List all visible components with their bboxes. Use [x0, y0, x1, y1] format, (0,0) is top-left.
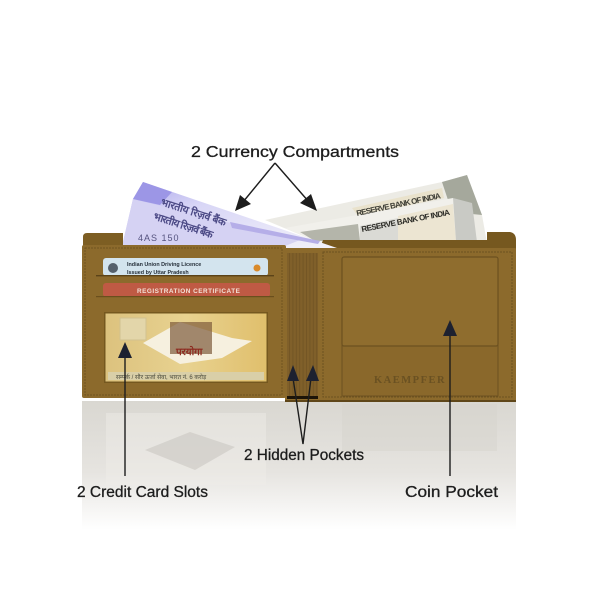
registration certificate card [103, 283, 270, 297]
label: coin pocket: Coin Pocket [405, 484, 499, 501]
wallet: right back flap [320, 232, 516, 250]
arrow: coin pocket [443, 320, 457, 476]
banknotes: grey-cream 200 rupee notes: RESERVE BANK OF INDIA [356, 191, 442, 218]
banknotes: purple 500 rupee notes: भारतीय रिज़र्व बैंक [159, 196, 229, 229]
wallet: left card panel [82, 245, 286, 398]
ID window with gold card: परयोगा [175, 345, 203, 358]
arrows: currency compartments [235, 163, 317, 211]
hidden pockets gusset [287, 253, 318, 396]
heading: 2 currency compartments: 2 Currency Compartments [191, 144, 399, 161]
card slot divider one [96, 275, 274, 276]
ID window with gold card [104, 312, 268, 383]
driving licence card: Indian Union Driving Licence [127, 262, 201, 268]
wallet: right panel [285, 248, 516, 402]
brand stamp: KAEMPFER [374, 375, 446, 386]
banknotes: grey-cream 200 rupee notes: RESERVE BANK OF INDIA [361, 208, 451, 234]
coin pocket flap [342, 257, 498, 346]
driving licence card [103, 258, 268, 276]
arrows: hidden pockets [287, 365, 319, 444]
wallet: back flap behind left panel [83, 233, 123, 246]
label: 2 hidden pockets: 2 Hidden Pockets [244, 447, 364, 464]
registration certificate card: REGISTRATION CERTIFICATE [137, 288, 241, 295]
coin pocket lower panel [342, 345, 498, 396]
driving licence card: Issued by Uttar Pradesh [127, 270, 189, 276]
reflection of wallet [82, 401, 516, 530]
banknotes: grey-cream 200 rupee notes [265, 175, 487, 243]
banknotes: purple 500 rupee notes: भारतीय रिज़र्व बैंक [152, 210, 216, 242]
arrow: credit card slots [118, 342, 132, 476]
ID window with gold card: सम्पर्क / सौर ऊर्जा सेवा, भारत नं. 6 करोड़ [116, 373, 207, 381]
card slot divider two [96, 296, 274, 297]
banknotes: purple 500 rupee notes [122, 182, 337, 248]
label: 2 credit card slots: 2 Credit Card Slots [77, 484, 208, 501]
banknotes: purple 500 rupee notes: 4AS 150 [138, 233, 180, 243]
